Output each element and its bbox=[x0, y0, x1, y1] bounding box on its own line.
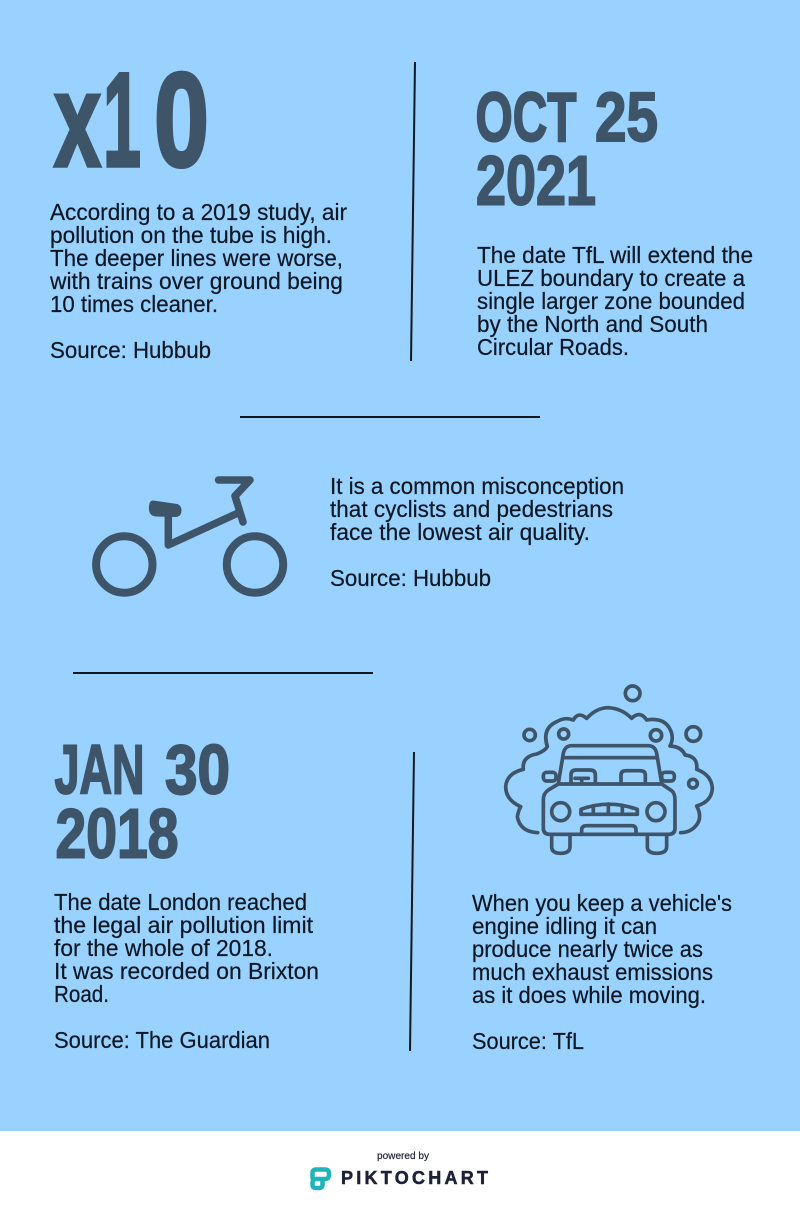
text block: Brixton Road: Source: The Guardian bbox=[54, 1027, 270, 1053]
date heading: Oct 25 2021: 25 bbox=[595, 78, 658, 156]
date heading: Jan 30 2018 bbox=[54, 730, 230, 872]
text block: idling emissions: much exhaust emissions bbox=[472, 959, 713, 985]
text block: ULEZ extension: by the North and South bbox=[477, 311, 708, 337]
text block: tube study: According to a 2019 study, air bbox=[50, 199, 347, 225]
date heading: Oct 25 2021 bbox=[476, 78, 658, 220]
footer: Piktochart branding bbox=[0, 1131, 800, 1211]
text block: tube study: with trains over ground being bbox=[49, 268, 343, 294]
text block: tube study: pollution on the tube is high. bbox=[50, 222, 332, 248]
icon: bicycle bbox=[96, 480, 283, 593]
panel: ULEZ date bbox=[476, 78, 753, 360]
text block: idling emissions: engine idling it can bbox=[472, 913, 657, 939]
text block: misconception: that cyclists and pedestrians bbox=[330, 496, 613, 522]
text: powered by: powered by bbox=[377, 1151, 429, 1162]
text block: idling emissions: Source: TfL bbox=[472, 1028, 584, 1054]
text block: tube study: 10 times cleaner. bbox=[50, 291, 218, 317]
stat heading: x10 bbox=[54, 46, 209, 195]
text block: idling emissions: produce nearly twice as bbox=[472, 936, 703, 962]
text block: Brixton Road: for the whole of 2018. bbox=[54, 935, 273, 961]
panel: tube pollution bbox=[49, 46, 347, 363]
text block: misconception: It is a common misconception bbox=[330, 473, 624, 499]
text block: idling emissions: as it does while moving. bbox=[472, 982, 706, 1008]
stat heading: x10: x bbox=[54, 46, 101, 195]
icon: car in exhaust cloud bbox=[506, 686, 712, 853]
text block: ULEZ extension bbox=[477, 242, 753, 360]
date heading: Oct 25 2021: OCT bbox=[476, 78, 576, 156]
text block: tube study: The deeper lines were worse, bbox=[50, 245, 343, 271]
text block: tube study bbox=[49, 199, 347, 363]
stat heading: x10: 0 bbox=[154, 46, 209, 195]
text block: idling emissions bbox=[472, 890, 732, 1054]
date heading: Jan 30 2018: 2018 bbox=[56, 794, 178, 872]
text block: misconception bbox=[330, 473, 624, 591]
date heading: Oct 25 2021: 2021 bbox=[476, 142, 596, 220]
text block: ULEZ extension: ULEZ boundary to create a bbox=[477, 265, 745, 291]
text block: Brixton Road: the legal air pollution limit bbox=[54, 912, 314, 938]
date heading: Jan 30 2018: 30 bbox=[165, 730, 230, 808]
panel: cyclists bbox=[96, 473, 624, 593]
text block: Brixton Road: Road. bbox=[54, 981, 109, 1007]
text block: Brixton Road: It was recorded on Brixton bbox=[54, 958, 319, 984]
text block: Brixton Road: The date London reached bbox=[54, 889, 307, 915]
stat heading: x10: 1 bbox=[103, 46, 141, 195]
date heading: Jan 30 2018: JAN bbox=[54, 730, 144, 808]
text block: ULEZ extension: Circular Roads. bbox=[477, 334, 629, 360]
text block: ULEZ extension: single larger zone bounded bbox=[477, 288, 745, 314]
text block: tube study: Source: Hubbub bbox=[50, 337, 211, 363]
panel: engine idling bbox=[472, 686, 732, 1054]
text block: Brixton Road bbox=[54, 889, 319, 1053]
text: Piktochart wordmark: PIKTOCHART bbox=[341, 1168, 488, 1188]
text block: misconception: face the lowest air quality. bbox=[330, 519, 590, 545]
panel: legal limit date bbox=[54, 730, 319, 1053]
text block: ULEZ extension: The date TfL will extend the bbox=[477, 242, 753, 268]
text block: idling emissions: When you keep a vehicle's bbox=[472, 890, 732, 916]
text block: misconception: Source: Hubbub bbox=[330, 565, 491, 591]
icon: Piktochart logo bbox=[312, 1170, 329, 1188]
